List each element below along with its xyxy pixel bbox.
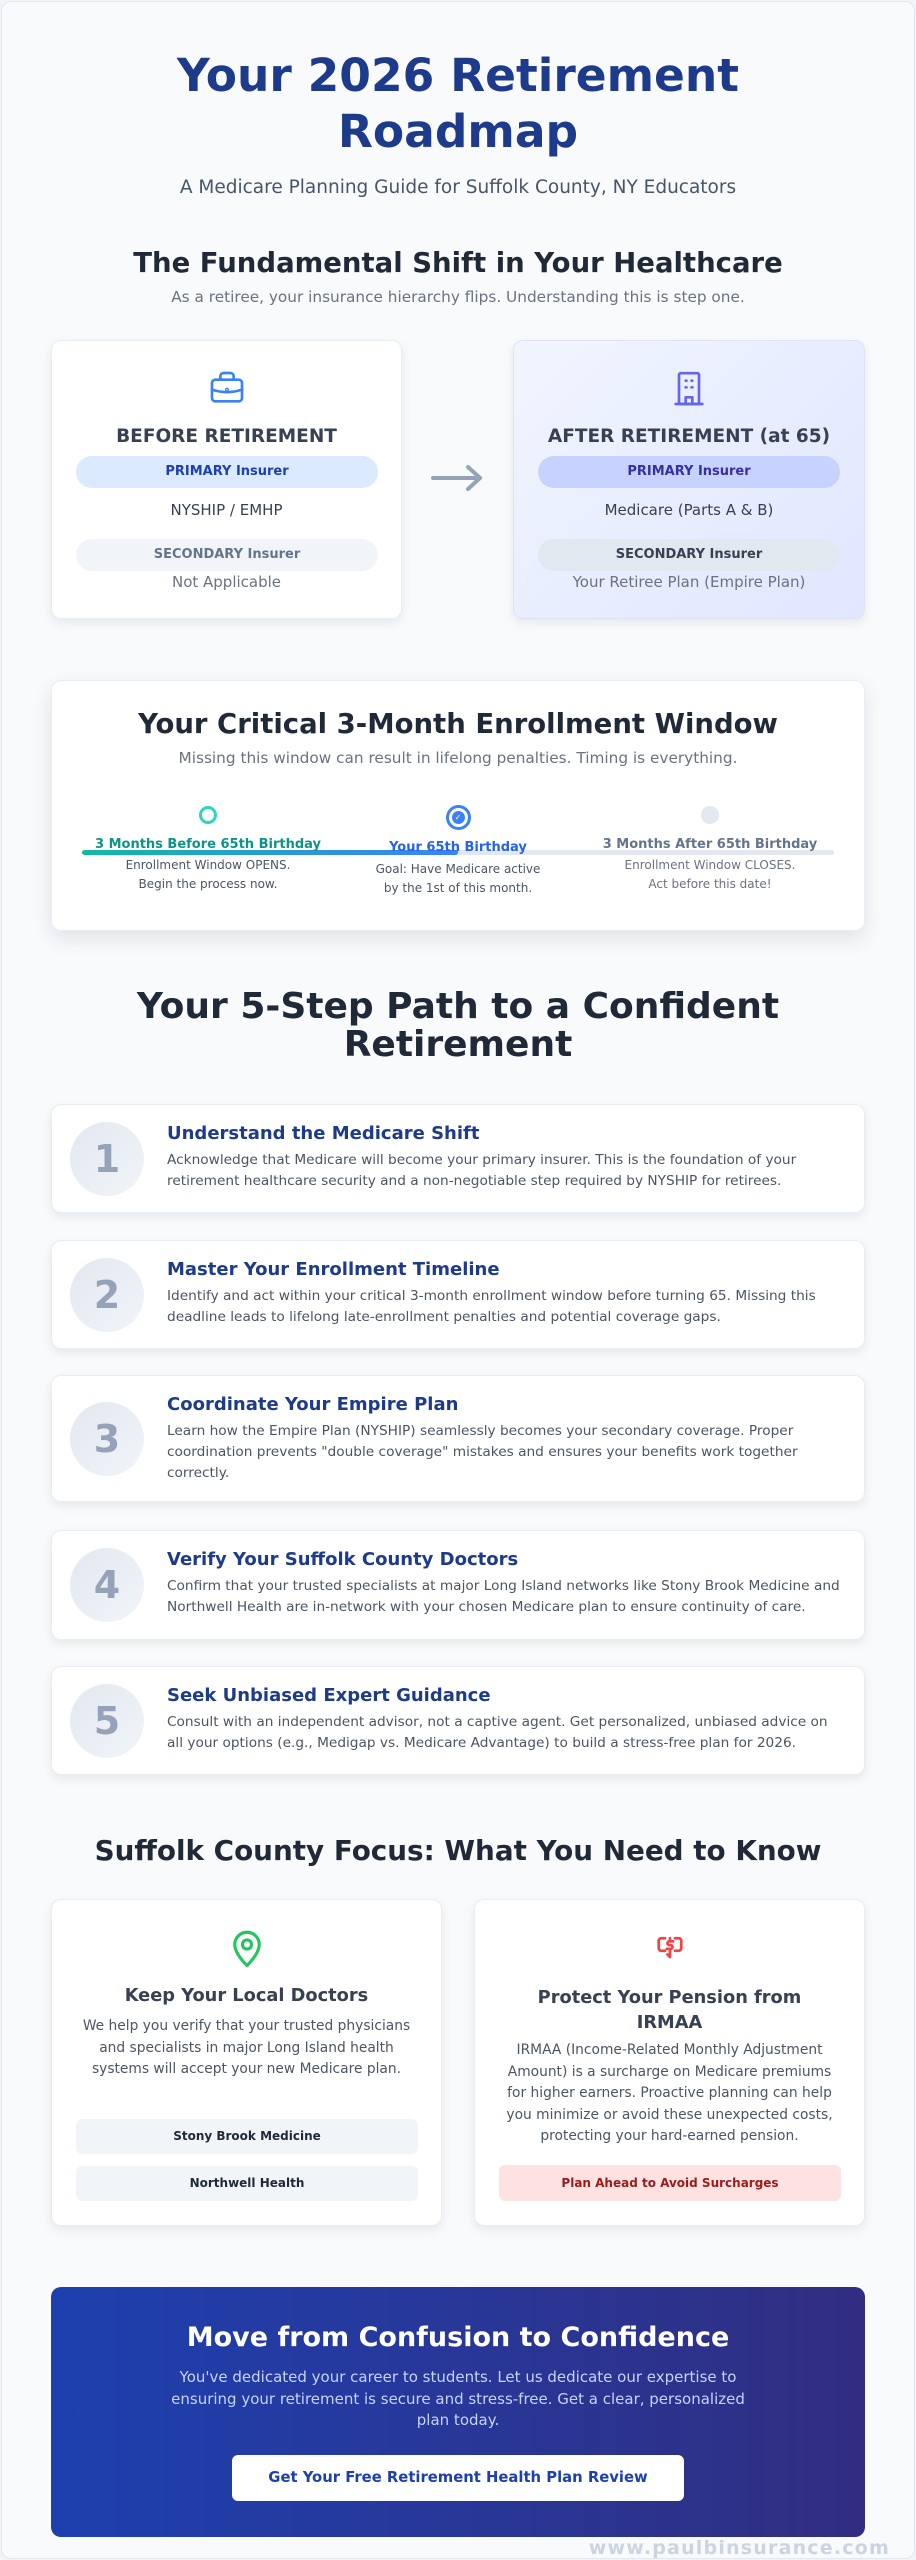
icon: briefcase [210, 372, 244, 403]
icon: money [657, 1936, 683, 1958]
panel: local doctors [51, 1899, 442, 2226]
pill: secondary: SECONDARY Insurer [154, 547, 300, 562]
panel: call to action [51, 2287, 865, 2537]
pill: primary [538, 456, 840, 488]
milestone: 65th birthday: Your 65th Birthday [389, 840, 527, 855]
milestone: 65th birthday [376, 805, 540, 895]
step text: Acknowledge that Medicare will become your primary insurer. This is the foundation of your retirement healthcare security and a non-negotiable step required by NYSHIP for retirees. [167, 1152, 796, 1189]
footer: website: www.paulbinsurance.com [589, 2537, 890, 2559]
pill: stony brook: Stony Brook Medicine [173, 2129, 321, 2143]
card heading: Protect Your Pension from [538, 1987, 801, 2008]
card heading: IRMAA [637, 2012, 702, 2033]
step 1 [51, 1104, 865, 1213]
card heading: Keep Your Local Doctors [125, 1985, 368, 2006]
CTA text: You've dedicated your career to students. Let us dedicate our expertise to ensuring your retirement is secure and stress-free. Get a clear, personalized plan today. [171, 2368, 745, 2429]
step text: Consult with an independent advisor, not a captive agent. Get personalized, unbiased advice on all your options (e.g., Medigap vs. Medicare Advantage) to build a stress-free plan for 2026. [167, 1714, 828, 1751]
text: NYSHIP: NYSHIP / EMHP [170, 501, 282, 519]
pill: primary [76, 456, 378, 488]
step title: Seek Unbiased Expert Guidance [167, 1685, 491, 1706]
number 5: 5 [94, 1699, 120, 1743]
subtitle: A Medicare Planning Guide for Suffolk County, NY Educators [180, 177, 736, 198]
arrow [431, 464, 482, 492]
number 3: 3 [94, 1417, 120, 1461]
pill: secondary [538, 539, 840, 571]
panel: after retirement [513, 340, 865, 619]
heading: before: BEFORE RETIREMENT [116, 426, 337, 447]
pill: secondary: SECONDARY Insurer [616, 547, 762, 562]
icon: map pin [233, 1930, 261, 1968]
step 2 [51, 1240, 865, 1349]
title [176, 49, 739, 158]
CTA button [232, 2455, 684, 2501]
pill: northwell [76, 2166, 418, 2201]
number 3 [70, 1402, 144, 1476]
panel: enrollment window [51, 680, 865, 931]
text: not applicable: Not Applicable [172, 573, 281, 591]
step 5 [51, 1666, 865, 1775]
milestone: 65th birthday: by the 1st of this month. [384, 881, 532, 895]
panel: IRMAA [474, 1899, 865, 2226]
step text: Learn how the Empire Plan (NYSHIP) seamlessly becomes your secondary coverage. Proper coordination prevents "double coverage" mistakes and ensures your benefits work together correctly. [167, 1423, 798, 1481]
CTA button: Get Your Free Retirement Health Plan Review [268, 2469, 648, 2486]
pill: stony brook [76, 2119, 418, 2154]
pill: plan ahead: Plan Ahead to Avoid Surcharges [561, 2176, 779, 2190]
step text: Confirm that your trusted specialists at major Long Island networks like Stony Brook Medicine and Northwell Health are in-network with your chosen Medicare plan to ensure continuity of care. [167, 1578, 840, 1615]
title: Your 2026 Retirement [177, 49, 739, 102]
milestone: after: Act before this date! [648, 877, 772, 891]
milestone: after: Enrollment Window CLOSES. [625, 858, 795, 872]
milestone: 65th birthday: Goal: Have Medicare active [376, 862, 540, 876]
heading: 5-step path [136, 986, 779, 1065]
title: Roadmap [338, 105, 578, 158]
milestone: before: Begin the process now. [139, 877, 277, 891]
icon: building [674, 372, 704, 406]
step 3 [51, 1375, 865, 1502]
milestone: before: 3 Months Before 65th Birthday [95, 837, 321, 852]
card text: We help you verify that your trusted physicians and specialists in major Long Island health systems will accept your new Medicare plan. [83, 2018, 410, 2077]
milestone: after: 3 Months After 65th Birthday [603, 837, 817, 852]
text: medicare: Medicare (Parts A & B) [605, 501, 773, 519]
number 5 [70, 1684, 144, 1758]
milestone: before [95, 806, 321, 891]
step title: Verify Your Suffolk County Doctors [167, 1549, 518, 1570]
timeline progress [82, 850, 458, 855]
pill: secondary [76, 539, 378, 571]
milestone: after [603, 806, 817, 891]
CTA heading: Move from Confusion to Confidence [187, 2322, 729, 2353]
step title: Master Your Enrollment Timeline [167, 1259, 500, 1280]
step 4 [51, 1530, 865, 1640]
heading: after: AFTER RETIREMENT (at 65) [548, 426, 830, 447]
number 1 [70, 1122, 144, 1196]
heading: fundamental shift: The Fundamental Shift in Your Healthcare [133, 247, 783, 279]
subheading: shift: As a retiree, your insurance hierarchy flips. Understanding this is step one. [171, 288, 745, 306]
step text: Identify and act within your critical 3-month enrollment window before turning 65. Missing this deadline leads to lifelong late-enrollment penalties and potential coverage gaps. [167, 1288, 816, 1325]
heading: enrollment: Your Critical 3-Month Enrollment Window [138, 708, 778, 740]
heading: 5-step path: Your 5-Step Path to a Confident [137, 986, 779, 1027]
text: retiree plan: Your Retiree Plan (Empire Plan) [573, 573, 805, 591]
subheading: enrollment: Missing this window can result in lifelong penalties. Timing is everything. [179, 749, 737, 767]
number 4: 4 [94, 1563, 120, 1607]
card heading [538, 1987, 801, 2033]
number 2 [70, 1258, 144, 1332]
number 1: 1 [94, 1137, 120, 1181]
panel: before retirement [51, 340, 402, 619]
pill: primary: PRIMARY Insurer [165, 464, 289, 479]
heading: 5-step path: Retirement [344, 1024, 572, 1065]
card text: IRMAA (Income-Related Monthly Adjustment Amount) is a surcharge on Medicare premiums for higher earners. Proactive planning can help you minimize or avoid these unexpected costs, protecting your hard-earned pension. [506, 2042, 833, 2144]
milestone: before: Enrollment Window OPENS. [126, 858, 290, 872]
pill: primary: PRIMARY Insurer [627, 464, 751, 479]
pill: plan ahead [499, 2165, 841, 2201]
milestone: 65th birthday: ✓ [455, 813, 461, 822]
number 4 [70, 1548, 144, 1622]
step title: Understand the Medicare Shift [167, 1123, 479, 1144]
step title: Coordinate Your Empire Plan [167, 1394, 458, 1415]
timeline track [82, 850, 834, 855]
pill: northwell: Northwell Health [190, 2176, 304, 2190]
heading: suffolk focus: Suffolk County Focus: What You Need to Know [95, 1834, 821, 1867]
number 2: 2 [94, 1273, 120, 1317]
